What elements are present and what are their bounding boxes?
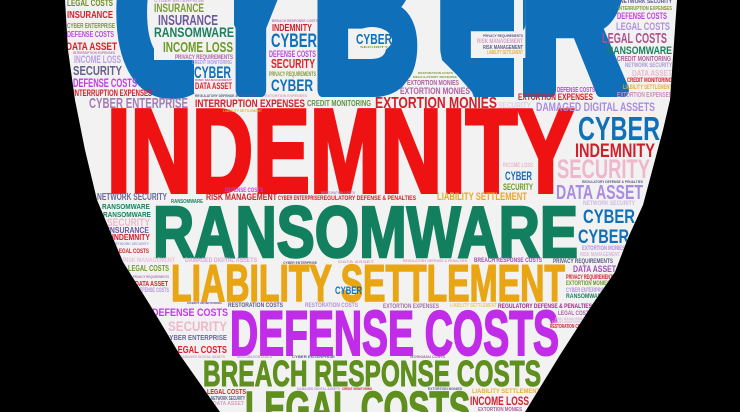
left terms beside ransomware: INDEMNITY [112, 233, 151, 242]
terms row above liability settlement: PRIVACY REQUIREMENTS [133, 274, 169, 279]
right terms beside indemnity: CYBER [578, 110, 660, 147]
terms row above liability settlement [123, 258, 542, 297]
right terms beside indemnity: INCOME LOSS [503, 163, 533, 169]
right terms beside ransomware and settlement: RANSOMWARE [566, 294, 605, 300]
terms beside letter y: DEFENSE COSTS [269, 49, 316, 59]
terms beside letter y [269, 18, 318, 95]
right terms beside indemnity: SECURITY [503, 182, 533, 192]
terms row above defense costs: RESTORATION COSTS [305, 303, 358, 309]
terms row above breach response costs: CYBER ENTERPRISE [292, 354, 335, 359]
right top column of small terms: CREDIT MONITORING [627, 78, 672, 84]
right terms beside defense costs: LEGAL COSTS [558, 311, 592, 317]
terms row below indemnity: CYBER ENTERPRISE [278, 196, 320, 202]
right top column of small terms: LIABILITY SETTLEMENT [623, 85, 672, 91]
terms inside letters b and e: CYBER [356, 31, 392, 48]
terms row above liability settlement: LEGAL COSTS [128, 264, 169, 273]
terms row above indemnity: REGULATORY DEFENSE [413, 75, 457, 79]
left terms beside ransomware: RANSOMWARE [102, 204, 150, 211]
terms row above indemnity: LIABILITY SETTLEMENT [223, 108, 262, 113]
terms inside letter c: DATA ASSET [195, 81, 232, 91]
terms row below indemnity: NETWORK SECURITY [97, 192, 167, 203]
terms row below indemnity: RESTORATION COSTS [321, 190, 355, 195]
right terms beside indemnity: NETWORK SECURITY [583, 201, 635, 207]
terms inside letters b and e [356, 34, 523, 54]
right top column of small terms: INTERRUPTION EXPENSES [618, 6, 673, 12]
terms inside letter c: CYBER [194, 63, 231, 82]
bottom small terms: CREDIT MONITORING [342, 386, 372, 391]
right terms beside indemnity: CYBER [505, 169, 532, 183]
terms row above breach response costs [180, 356, 445, 358]
terms row above defense costs: EXTORTION EXPENSES [383, 304, 439, 310]
left terms beside defense costs [152, 307, 228, 356]
terms inside letters b and e: PRIVACY REQUIREMENTS [483, 33, 523, 38]
terms inside letters b and e: RISK MANAGEMENT [477, 39, 523, 45]
headline word: breach response costs: BREACH RESPONSE COSTS [203, 353, 541, 394]
right terms beside ransomware and settlement: CYBER [583, 207, 635, 228]
terms inside letter c: PRIVACY REQUIREMENTS [175, 55, 233, 61]
terms inside letter c: CREDIT MONITORING [192, 60, 232, 66]
terms row above defense costs: RESTORATION COSTS [228, 303, 283, 309]
terms row above defense costs [187, 302, 592, 308]
terms row below indemnity: REGULATORY DEFENSE & PENALTIES [320, 196, 416, 202]
terms beside letter y: INDEMNITY [272, 23, 312, 34]
bottom small terms: NETWORK SECURITY [211, 396, 245, 402]
bottom small terms: EXTORTION MONIES [428, 386, 462, 391]
terms inside letter c: RANSOMWARE [154, 24, 234, 40]
terms row above indemnity: EXTORTION MONIES [375, 95, 497, 112]
terms row above defense costs: REGULATORY DEFENSE & PENALTIES [498, 304, 592, 310]
right top column of small terms [602, 0, 673, 99]
bottom small terms: DATA ASSET [213, 401, 244, 407]
terms row above indemnity: INTERRUPTION EXPENSES [195, 98, 305, 110]
left terms beside defense costs: DEFENSE COSTS [152, 307, 228, 319]
bottom small terms [207, 386, 540, 412]
right top column of small terms: CREDIT MONITORING [617, 56, 671, 63]
left terms beside defense costs: LEGAL COSTS [173, 345, 227, 356]
terms row above defense costs: CREDIT MONITORING [187, 301, 223, 305]
left top column of small terms: SECURITY [73, 63, 122, 78]
terms row above indemnity: EXTORTION EXPENSES [265, 93, 307, 98]
terms beside letter y: CYBER [271, 76, 313, 95]
right top column of small terms: LEGAL COSTS [602, 30, 667, 47]
terms row above indemnity: RESTORATION COSTS [418, 71, 453, 75]
terms inside letters b and e: SECURITY [360, 45, 388, 49]
right terms beside defense costs: RESTORATION COSTS [550, 324, 587, 330]
terms inside letter c: INSURANCE [154, 1, 204, 15]
terms beside letter y: CYBER [271, 31, 317, 52]
terms row above liability settlement: CYBER [335, 285, 362, 297]
terms row below indemnity: DEFENSE COSTS [225, 188, 263, 194]
terms row above liability settlement: BREACH RESPONSE COSTS [474, 258, 542, 264]
headline word: ransomware: RANSOMWARE [153, 193, 578, 273]
terms row above liability settlement: DEFENSE COSTS [137, 288, 169, 294]
terms inside letter c: INSURANCE [158, 12, 218, 29]
right top column of small terms: DATA ASSET [632, 69, 672, 78]
light gaps inside the cyber letters [154, 0, 523, 100]
right top column of small terms: EXTORTION EXPENSES [617, 92, 672, 99]
terms row above indemnity: EXTORTION MONIES [400, 86, 470, 96]
right terms beside defense costs [550, 310, 588, 328]
right top column of small terms: NETWORK SECURITY [625, 63, 672, 69]
bottom small terms: DAMAGED DIGITAL ASSETS [297, 386, 340, 391]
terms row above indemnity: REGULATORY DEFENSE & PENALTIES [195, 93, 257, 98]
terms row above liability settlement: DATA ASSET [135, 281, 169, 288]
terms row above breach response costs: RESTORATION COSTS [237, 354, 272, 359]
left top column of small terms: DEFENSE COSTS [73, 76, 137, 90]
right terms beside ransomware and settlement: PRIVACY REQUIREMENTS [553, 259, 613, 265]
terms inside letters b and e: LIABILITY SETTLEMENT [487, 50, 523, 56]
right terms beside indemnity [437, 110, 660, 207]
right terms beside indemnity: LIABILITY SETTLEMENT [437, 191, 527, 203]
terms row above liability settlement: CYBER ENTERPRISE [283, 260, 317, 265]
right terms beside indemnity: INDEMNITY [575, 141, 655, 162]
right terms beside defense costs: RISK MANAGEMENT [555, 316, 587, 321]
right terms beside ransomware and settlement: RISK MANAGEMENT [580, 252, 620, 258]
right terms beside ransomware and settlement: CYBER ENTERPRISE [566, 288, 607, 294]
terms beside letter y: BREACH RESPONSE COSTS [272, 18, 318, 23]
terms row above liability settlement: DAMAGED DIGITAL ASSETS [185, 258, 257, 264]
left terms beside ransomware: NETWORK SECURITY [113, 241, 149, 246]
left terms beside ransomware: INSURANCE [108, 226, 150, 235]
terms row below indemnity: RISK MANAGEMENT [206, 192, 277, 202]
left top column of small terms: DEFENSE COSTS [67, 30, 114, 39]
bottom small terms: INCOME LOSS [470, 394, 529, 408]
left top column of small terms: CYBER ENTERPRISE [67, 23, 115, 30]
terms row above defense costs: LIABILITY SETTLEMENT [450, 303, 497, 309]
right terms beside ransomware and settlement: CYBER [578, 227, 629, 248]
left top column of small terms: CYBER ENTERPRISE [89, 95, 188, 112]
right terms beside ransomware and settlement: PRIVACY REQUIREMENTS [566, 275, 615, 281]
terms row above indemnity [195, 71, 655, 114]
left top column of small terms: INTERRUPTION EXPENSES [73, 50, 115, 55]
right top column of small terms: LEGAL COSTS [616, 21, 670, 33]
terms row above breach response costs: WORKMAN COSTS [410, 354, 445, 359]
right top column of small terms: RANSOMWARE [607, 45, 672, 57]
left top column of small terms: DATA ASSET [66, 41, 117, 53]
terms row below indemnity: RANSOMWARE [171, 199, 204, 205]
left terms beside ransomware: LEGAL COSTS [116, 249, 149, 255]
left terms beside ransomware [102, 204, 151, 255]
terms row above indemnity: DAMAGED DIGITAL ASSETS [536, 100, 655, 114]
bottom small terms: LEGAL COSTS [207, 389, 246, 396]
left top column of small terms: INTERRUPTION EXPENSES [73, 88, 152, 98]
left top column of small terms: INCOME LOSS [74, 54, 121, 66]
right terms beside ransomware and settlement: EXTORTION MONIES [582, 246, 625, 252]
terms row below indemnity [97, 188, 416, 205]
right terms beside indemnity: DATA ASSET [556, 182, 643, 204]
terms inside letter c [154, 0, 234, 91]
left terms beside ransomware: SECURITY [107, 217, 151, 229]
left top column of small terms: INSURANCE [67, 10, 113, 21]
right terms beside ransomware and settlement [553, 207, 635, 300]
right terms beside indemnity: REGULATORY DEFENSE & PENALTIES [582, 179, 643, 184]
left top column of small terms [66, 0, 188, 112]
left terms beside defense costs: SECURITY [168, 318, 228, 334]
right terms beside ransomware and settlement: DATA ASSET [573, 264, 616, 274]
terms row above indemnity: SECURITY [498, 101, 532, 110]
terms inside letter c: RISK MANAGEMENT [195, 78, 232, 82]
terms inside letter c: INCOME LOSS [163, 39, 233, 56]
terms row above indemnity: EXTORTION EXPENSES [518, 92, 593, 102]
terms beside letter y: PRIVACY REQUIREMENTS [269, 72, 316, 78]
left terms beside defense costs: CYBER ENTERPRISE [165, 335, 227, 342]
bottom small terms: LIABILITY SETTLEMENT [472, 389, 540, 395]
terms row above liability settlement: REGULATORY DEFENSE & PENALTIES [403, 258, 467, 263]
terms row above breach response costs: DAMAGED DIGITAL ASSETS [180, 354, 225, 359]
left terms beside ransomware: RANSOMWARE [103, 212, 151, 219]
terms beside letter y: SECURITY [271, 56, 315, 71]
terms inside letters b and e: RISK MANAGEMENT [483, 45, 523, 51]
terms row above liability settlement: DATA ASSET [338, 259, 375, 264]
terms row above liability settlement: RISK MANAGEMENT [123, 258, 175, 264]
right terms beside ransomware and settlement: EXTORTION MONIES [566, 281, 610, 287]
right top column of small terms: DEFENSE COSTS [617, 11, 667, 21]
terms row above indemnity: EXTORTION MONIES [407, 80, 459, 87]
terms row above indemnity: DEFENSE COSTS [557, 87, 595, 94]
right terms beside indemnity: SECURITY [557, 154, 650, 184]
right terms beside defense costs: CREDIT MONITORING [552, 319, 584, 324]
terms row above indemnity: CREDIT MONITORING [307, 99, 371, 108]
